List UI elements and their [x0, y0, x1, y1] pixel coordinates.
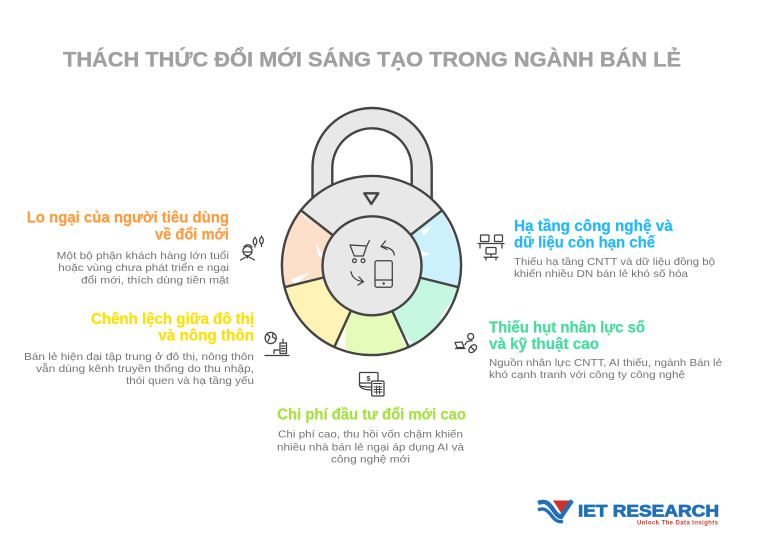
icon: money and calculator: $	[366, 374, 371, 383]
lock centre hub	[322, 216, 422, 315]
text: consumer concern: hoặc vùng chưa phát triển e ngại	[58, 262, 229, 274]
logo: Viet Research	[538, 500, 719, 526]
text: digital workforce: khó cạnh tranh với công ty công nghệ	[489, 369, 685, 381]
text: infrastructure	[514, 256, 715, 280]
sketch gaps in the fills	[290, 212, 456, 350]
text: investment cost: công nghệ mới	[331, 454, 410, 466]
icon: people and laptop	[455, 334, 478, 354]
heading: urban rural gap: Chênh lệch giữa đô thị	[91, 311, 254, 328]
heading: infrastructure: dữ liệu còn hạn chế	[514, 235, 655, 252]
text: infrastructure: Thiếu hạ tầng CNTT và dữ liệu đồng bộ	[514, 256, 715, 268]
text: investment cost	[277, 429, 464, 466]
text: urban rural gap: Bán lẻ hiện đại tập trung ở đô thị, nông thôn	[24, 351, 254, 363]
heading: urban rural gap	[91, 311, 254, 345]
heading: infrastructure	[514, 218, 673, 252]
heading: digital workforce	[489, 319, 645, 353]
icon: phone	[375, 261, 392, 287]
lock outer ring	[282, 176, 461, 355]
icon: connected workstations	[478, 235, 504, 260]
icon: keyhole triangle	[364, 193, 378, 204]
segment: digital workforce (mint)	[392, 278, 458, 347]
heading: urban rural gap: và nông thôn	[158, 328, 254, 345]
logo mark	[538, 500, 572, 522]
heading: consumer concern: Lo ngại của người tiêu dùng	[27, 210, 229, 227]
text: consumer concern	[57, 250, 229, 286]
icon: shopping cart	[350, 240, 370, 263]
text: digital workforce	[489, 357, 722, 381]
heading: infrastructure: Hạ tầng công nghệ và	[514, 218, 673, 235]
text: consumer concern: đổi mới, thích dùng tiền mặt	[81, 274, 229, 286]
top segment with pointer	[301, 176, 442, 235]
heading: digital workforce: và kỹ thuật cao	[489, 336, 599, 353]
text: consumer concern: Một bộ phận khách hàng lớn tuổi	[57, 250, 229, 262]
segment dividers	[285, 210, 458, 347]
text: investment cost: nhiều nhà bán lẻ ngại áp dụng AI và	[277, 442, 464, 454]
logo wordmark: IET RESEARCH	[578, 502, 719, 521]
text: infrastructure: khiến nhiều DN bán lẻ khó số hóa	[514, 268, 688, 280]
heading: consumer concern	[27, 210, 229, 243]
lock shackle	[312, 108, 432, 200]
heading: digital workforce: Thiếu hụt nhân lực số	[489, 319, 645, 336]
icon: arrow bottom	[351, 272, 364, 285]
segment: infrastructure (blue)	[410, 210, 461, 287]
icon: elderly consumer	[240, 236, 263, 260]
icon: money and calculator	[360, 372, 384, 396]
text: urban rural gap: vẫn dùng kênh truyền thống do thu nhập,	[36, 362, 254, 375]
title: THÁCH THỨC ĐỔI MỚI SÁNG TẠO TRONG NGÀNH BÁN LẺ	[63, 46, 681, 72]
text: investment cost: Chi phí cao, thu hồi vốn chậm khiến	[278, 429, 463, 441]
segment: consumer concern (orange)	[282, 210, 332, 287]
lock body base	[282, 176, 461, 355]
icon: globe and buildings	[265, 332, 289, 356]
heading: consumer concern: về đổi mới	[155, 225, 229, 243]
segment: investment cost (lime)	[334, 310, 409, 355]
logo tagline: Unlock The Data Insights	[637, 520, 719, 526]
padlock diagram	[282, 108, 461, 355]
text: digital workforce: Nguồn nhân lực CNTT, AI thiếu, ngành Bán lẻ	[489, 357, 722, 369]
text: urban rural gap: thói quen và hạ tầng yếu	[126, 375, 254, 387]
icon: arrow top	[381, 241, 394, 255]
text: urban rural gap	[24, 351, 254, 387]
segment: urban rural gap (yellow)	[285, 278, 351, 347]
heading: investment cost: Chi phí đầu tư đổi mới cao	[277, 405, 466, 423]
